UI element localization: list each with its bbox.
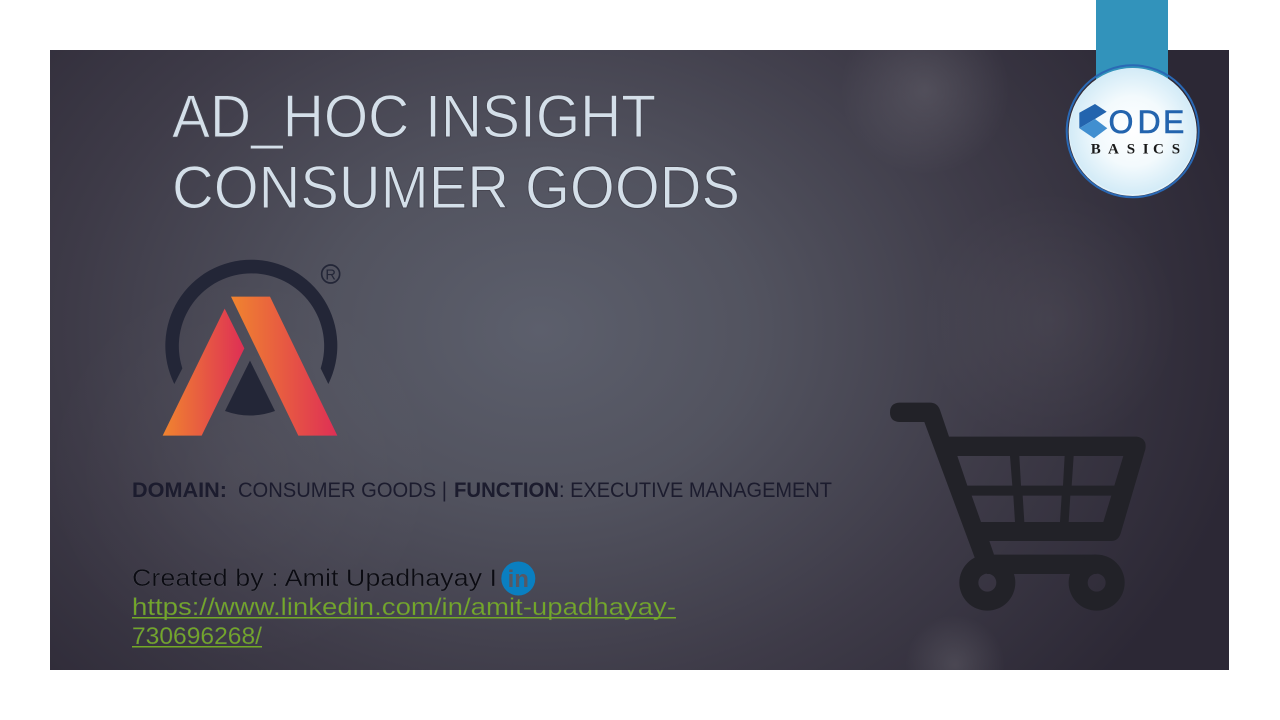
icon: LinkedIn: in xyxy=(508,566,529,593)
panel: dark slide background xyxy=(50,50,1229,670)
domain and function line: DOMAIN: xyxy=(132,479,227,502)
LinkedIn profile link xyxy=(132,594,676,650)
domain and function line: : EXECUTIVE MANAGEMENT xyxy=(559,479,832,502)
badge: Codebasics logo xyxy=(1067,65,1199,197)
LinkedIn profile link: https://www.linkedin.com/in/amit-upadhayay- xyxy=(132,594,676,621)
icon: shopping cart xyxy=(890,403,1146,611)
domain and function line xyxy=(132,479,832,502)
badge: Codebasics logo: ODE xyxy=(1108,104,1184,140)
icon: hexagon C mark xyxy=(1079,104,1107,138)
title: CONSUMER GOODS xyxy=(172,154,740,221)
icon: company A logo: R xyxy=(325,267,336,283)
domain and function line: CONSUMER GOODS | xyxy=(238,479,447,502)
LinkedIn profile link: 730696268/ xyxy=(132,623,262,650)
icon: LinkedIn xyxy=(501,562,535,596)
badge: Codebasics logo: BASICS xyxy=(1091,141,1180,157)
title xyxy=(172,83,740,221)
icon: company A logo xyxy=(163,260,340,436)
author credit: Created by : Amit Upadhayay I xyxy=(132,565,497,592)
domain and function line: FUNCTION xyxy=(454,479,559,502)
ribbon tab xyxy=(1096,0,1168,82)
title: AD_HOC INSIGHT xyxy=(172,83,656,150)
